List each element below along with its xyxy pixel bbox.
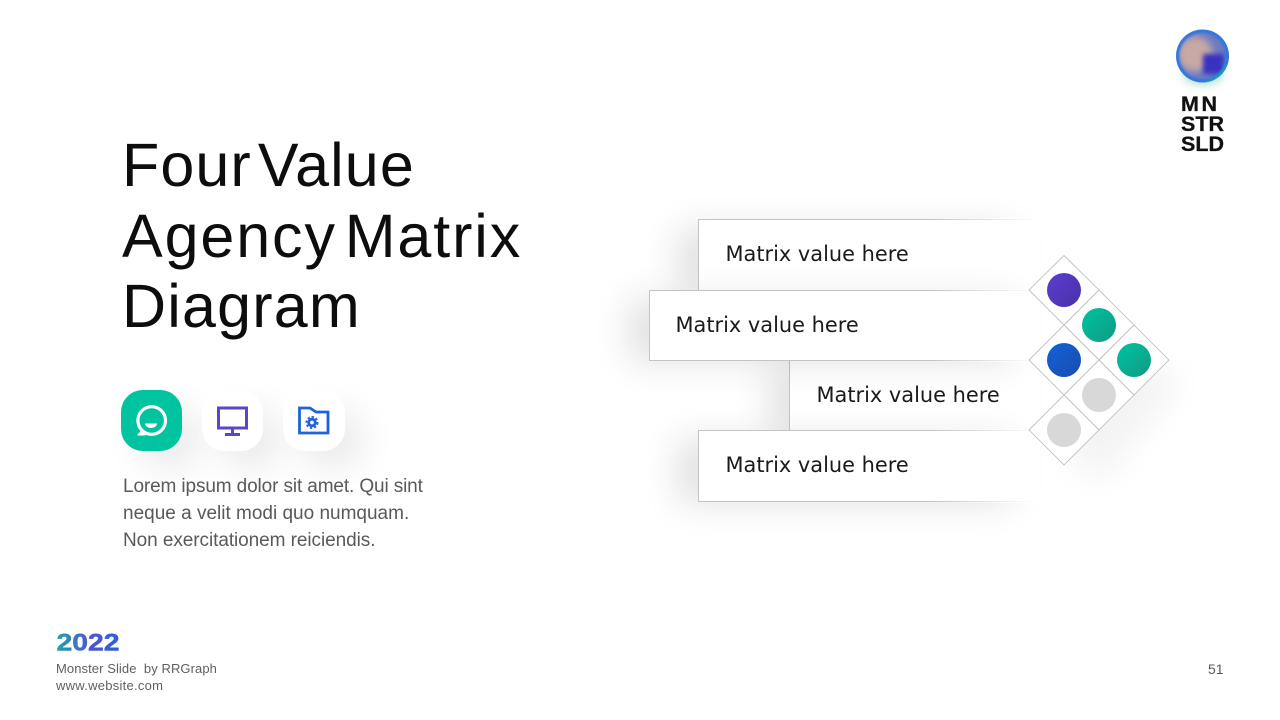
logo text: STR bbox=[1181, 112, 1224, 136]
body text: Lorem ipsum dolor sit amet. Qui sint bbox=[123, 476, 423, 497]
logo text: SLD bbox=[1181, 132, 1224, 156]
footer credit: www.website.com bbox=[56, 678, 163, 692]
body text bbox=[123, 476, 423, 551]
page number: 51 bbox=[1208, 661, 1224, 677]
icon row bbox=[121, 390, 362, 468]
matrix row 1: Matrix value here bbox=[726, 242, 909, 266]
logo bbox=[1176, 30, 1229, 156]
cell: green right bbox=[1099, 325, 1169, 395]
matrix row 4 bbox=[698, 430, 1040, 502]
logo orb bbox=[1176, 30, 1229, 90]
matrix row 2: Matrix value here bbox=[676, 313, 859, 337]
matrix diagram bbox=[620, 218, 1170, 513]
matrix row 3: Matrix value here bbox=[816, 383, 1000, 407]
icon: monitor on white tile bbox=[202, 390, 263, 451]
cell: grey bbox=[1064, 360, 1134, 430]
title bbox=[122, 131, 522, 340]
matrix row 3 bbox=[789, 360, 1040, 431]
body text: neque a velit modi quo numquam. bbox=[123, 503, 409, 524]
cell: grey bottom bbox=[1029, 395, 1099, 465]
footer credit: Monster Slide by RRGraph bbox=[56, 661, 217, 676]
logo text bbox=[1181, 92, 1224, 156]
cell: green bbox=[1064, 290, 1134, 360]
body text: Non exercitationem reiciendis. bbox=[123, 530, 375, 551]
cell: purple bbox=[1029, 256, 1099, 325]
diamond grid bbox=[1028, 255, 1170, 466]
title: Four Value bbox=[122, 131, 415, 199]
footer credit bbox=[56, 661, 217, 692]
matrix row 1 bbox=[698, 219, 1040, 291]
matrix row 4: Matrix value here bbox=[726, 453, 909, 477]
title: Agency Matrix bbox=[122, 202, 522, 270]
icon: settings folder on white tile bbox=[283, 390, 345, 451]
matrix row 2 bbox=[649, 290, 1040, 361]
logo text: MN bbox=[1181, 92, 1220, 116]
cell: blue bbox=[1029, 325, 1099, 395]
icon: chat bubble on green tile bbox=[121, 390, 182, 451]
title: Diagram bbox=[122, 272, 361, 340]
